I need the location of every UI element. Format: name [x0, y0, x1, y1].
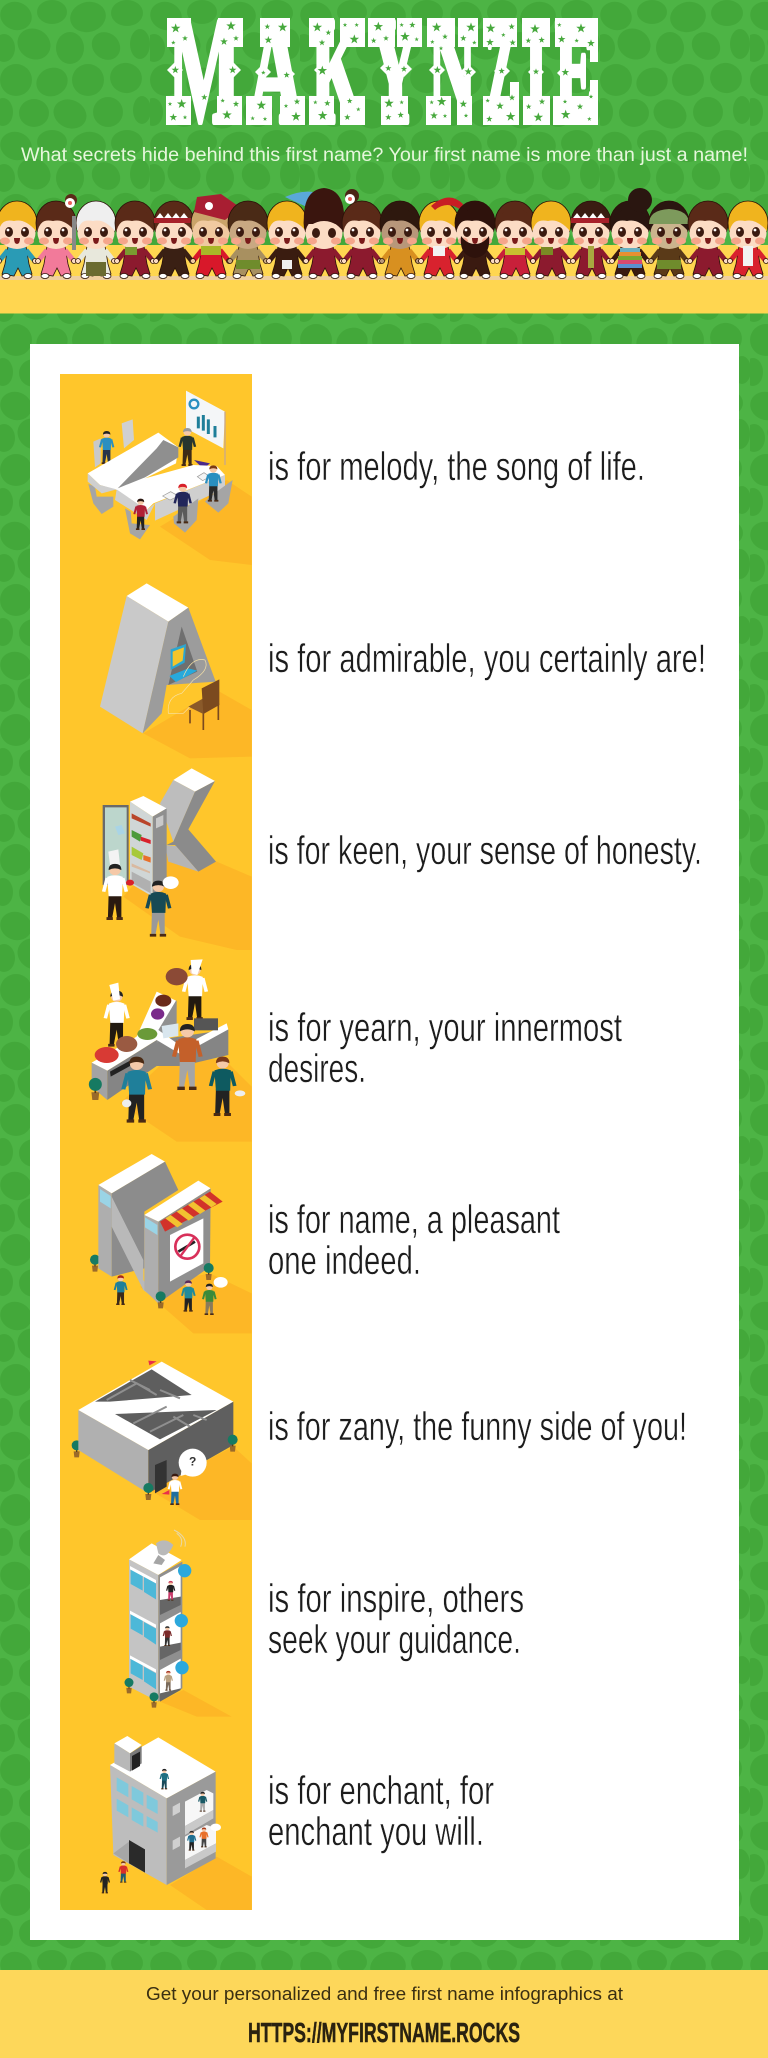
row: Z [72, 1361, 687, 1520]
panel: white content card [30, 344, 739, 1940]
child 19 [688, 201, 728, 278]
child 2 [36, 194, 77, 278]
child 15 [530, 201, 572, 278]
row: E [101, 1736, 494, 1910]
subtitle: What secrets hide behind this first name? Your first name is more than just a name! [21, 145, 748, 166]
illustration: I tower with satellite dish [124, 1530, 232, 1717]
row: M [88, 391, 645, 565]
illustration: E office building [101, 1736, 252, 1910]
row: Y [89, 959, 622, 1142]
text: E lines [268, 1769, 494, 1854]
text: I lines [268, 1577, 524, 1662]
child 5 [154, 201, 194, 278]
child 11 [380, 201, 420, 278]
header [0, 0, 768, 314]
child 4 [114, 201, 156, 278]
footer [0, 1970, 768, 2058]
text: N lines: is for name, a pleasant [268, 1198, 560, 1242]
child 17 [610, 188, 652, 278]
row: K [103, 768, 702, 950]
row: A [100, 583, 706, 758]
child 6 [190, 194, 241, 278]
illustration: Z maze building: ? [189, 1454, 196, 1468]
illustration: Z maze building [72, 1361, 252, 1520]
row of cartoon children [0, 188, 768, 278]
text: I lines: is for inspire, others [268, 1577, 524, 1621]
child 20 [728, 201, 768, 278]
illustration: Y buffet counter [89, 959, 252, 1142]
footer url: HTTPS://MYFIRSTNAME.ROCKS [248, 2017, 520, 2048]
yellow ground band [0, 245, 768, 314]
text: N lines: one indeed. [268, 1239, 421, 1283]
text: I lines: seek your guidance. [268, 1618, 521, 1662]
text: Y lines: is for yearn, your innermost [268, 1006, 622, 1050]
child 3 [72, 201, 116, 278]
illustration: A with desk [100, 583, 252, 758]
yellow illustration column [60, 374, 252, 1910]
text: Y lines [268, 1006, 622, 1091]
child 7 [228, 201, 268, 278]
child 12 [418, 197, 463, 278]
text: E lines: is for enchant, for [268, 1769, 494, 1813]
child 1 [0, 201, 38, 278]
child 9 [304, 188, 344, 278]
title: MAKYNZIE [166, 0, 598, 156]
child 10 [342, 189, 382, 278]
child 8 [266, 192, 325, 278]
footer text: Get your personalized and free first name infographics at [146, 1984, 623, 2004]
child 18 [648, 201, 690, 278]
child 14 [494, 201, 536, 278]
text: Y lines: desires. [268, 1047, 366, 1091]
row: I [124, 1530, 524, 1717]
illustration: N building with awning [90, 1154, 252, 1333]
child 13 [454, 201, 496, 278]
text: N lines [268, 1198, 560, 1283]
child 16 [570, 201, 612, 278]
illustration: M meeting table [88, 391, 252, 565]
illustration: K with open fridge [103, 768, 252, 950]
row: N [90, 1154, 560, 1333]
text: E lines: enchant you will. [268, 1810, 484, 1854]
